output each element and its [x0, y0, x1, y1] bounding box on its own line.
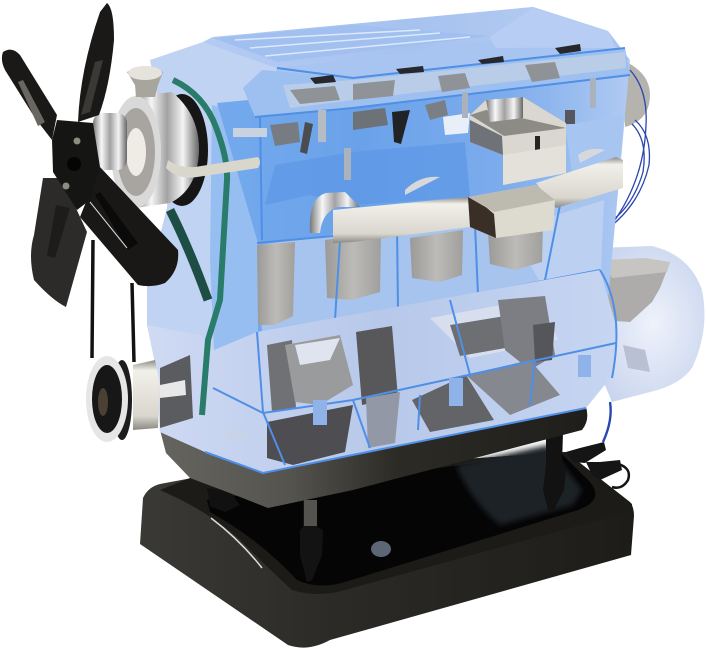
rear grey motor and blue wires: [603, 60, 650, 442]
base button: [371, 541, 391, 557]
dark grey tray under crankcase: [160, 407, 587, 508]
manifold elbow: [310, 192, 360, 233]
drive belt: [92, 240, 134, 362]
valve gear and bolts: [233, 78, 596, 180]
fan blade: top: [78, 3, 114, 122]
chrome lower pulley: [86, 355, 193, 442]
junction box: [468, 185, 555, 238]
block face: [217, 60, 630, 340]
right arm: [536, 157, 623, 208]
chrome cap: [127, 67, 163, 97]
crankcase blue lines: [205, 270, 616, 473]
carburettor block: [470, 97, 566, 185]
top backing: [203, 7, 630, 90]
chrome rod: [166, 157, 260, 178]
black fan: [2, 3, 178, 307]
crankcase bolts: [226, 355, 591, 440]
fan blade: lower left: [31, 178, 87, 307]
motor inside cap: [600, 260, 670, 322]
crankcase lower flats: [267, 360, 560, 465]
chrome upper pulley: [93, 66, 260, 208]
crankcase: [147, 270, 616, 473]
pistons: [257, 224, 543, 325]
domed head fittings: [405, 177, 440, 195]
fan blade: upper left: [2, 50, 57, 140]
piston bay: [258, 195, 600, 335]
right end cap cylinder: [590, 246, 704, 402]
support posts: [207, 432, 566, 582]
rocker rail: [243, 48, 630, 117]
green timing belt: [170, 80, 227, 415]
power cables and plugs: [566, 442, 629, 488]
left end housing: [147, 42, 277, 473]
crankcase interior parts: [267, 296, 558, 412]
rail blue edge lines: [255, 48, 630, 335]
black display base: [140, 432, 634, 648]
dark rocker marks: [310, 44, 581, 84]
engine body: [147, 7, 630, 473]
chrome manifold: [310, 97, 623, 243]
top cover: [203, 7, 616, 68]
fan hub plate: [52, 120, 100, 210]
fan blade: lower right: [80, 167, 178, 286]
manifold bar: [333, 197, 470, 243]
